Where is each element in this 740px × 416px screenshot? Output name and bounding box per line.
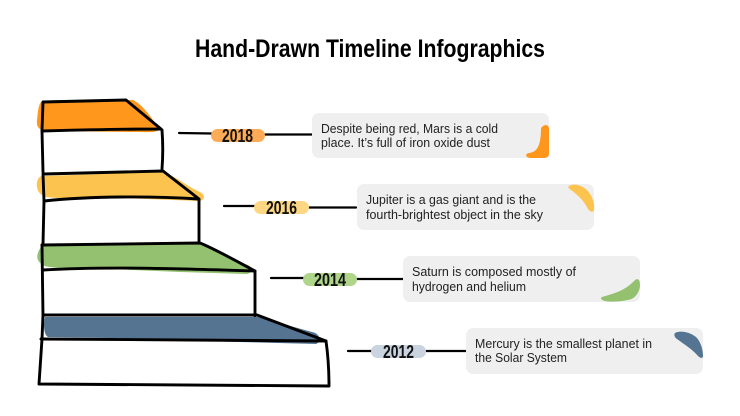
tier 2016: yellow [37,171,204,244]
tier 2012: blue [39,315,329,386]
row 2016 [224,184,594,230]
title: Hand-Drawn Timeline Infographics [195,35,545,63]
stepped tower timeline illustration [37,100,329,386]
card: Jupiter [357,184,594,230]
row 2012 [348,328,703,374]
tier 2018: orange [37,100,163,172]
card: Mercury: the Solar System [475,351,567,365]
connector line 2012 [348,350,466,352]
year pill 2012: 2012 [383,342,414,362]
card: Mars: Despite being red, Mars is a cold [321,122,498,136]
card: Mars [312,113,549,158]
connector line 2014 [271,278,403,279]
card: Mercury [466,328,703,374]
connector line 2018 [179,133,312,134]
card: Saturn: hydrogen and helium [412,280,526,294]
connector line 2016 [224,206,356,208]
year pill 2016: 2016 [266,198,297,218]
row 2018 [179,113,549,158]
card: Saturn [403,256,640,302]
year pill 2014: 2014 [314,270,346,290]
row 2014 [271,256,640,302]
year pill 2018: 2018 [222,126,253,146]
card: Jupiter: Jupiter is a gas giant and is the [366,193,536,207]
card: Mars: place. It’s full of iron oxide dust [321,136,491,150]
card: Mercury: Mercury is the smallest planet in [475,337,652,351]
card: Jupiter: fourth-brightest object in the sky [366,208,544,222]
card: Saturn: Saturn is composed mostly of [412,265,577,279]
tier 2014: green [37,243,255,316]
